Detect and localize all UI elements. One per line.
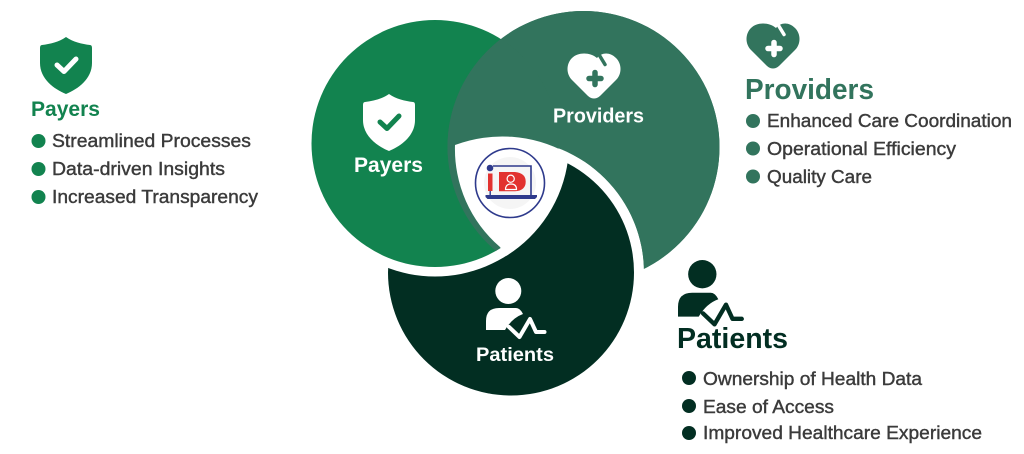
list item: Enhanced Care Coordination — [767, 111, 1012, 131]
icon: providers heart — [568, 53, 620, 98]
panel: providers details — [745, 23, 1012, 187]
providers circle base — [448, 11, 720, 283]
icon: payers shield — [363, 94, 415, 151]
panel: patients details — [677, 260, 982, 443]
list item: Ownership of Health Data — [703, 369, 923, 389]
icon: centre logo — [476, 148, 544, 218]
icon: shield — [40, 37, 92, 94]
icon: heart — [746, 23, 800, 68]
providers strip over payers — [448, 146, 558, 251]
list item: Streamlined Processes — [52, 131, 251, 151]
list item: Quality Care — [767, 167, 872, 187]
patients circle — [388, 150, 634, 396]
providers circle overlap — [501, 11, 720, 269]
payers circle — [312, 20, 558, 267]
icon: patient with pulse — [486, 278, 545, 337]
patients separation ring — [378, 140, 644, 406]
list item: Operational Efficiency — [767, 139, 956, 159]
list item: Data-driven Insights — [52, 159, 225, 179]
payers separation ring — [302, 10, 568, 276]
label: Patients: Patients — [476, 345, 554, 366]
list item: Ease of Access — [703, 397, 834, 417]
icon: patient with pulse — [678, 260, 742, 324]
panel: payers details — [31, 37, 258, 207]
label: Providers: Providers — [553, 106, 644, 128]
heading: Providers: Providers — [745, 74, 874, 106]
list item: Improved Healthcare Experience — [703, 423, 982, 443]
list item: Increased Transparency — [52, 187, 258, 207]
heading: Payers: Payers — [31, 98, 100, 121]
heading: Patients: Patients — [677, 323, 788, 355]
white centre region — [455, 136, 568, 256]
panel: venn diagram — [302, 10, 720, 406]
label: Payers: Payers — [354, 154, 423, 177]
